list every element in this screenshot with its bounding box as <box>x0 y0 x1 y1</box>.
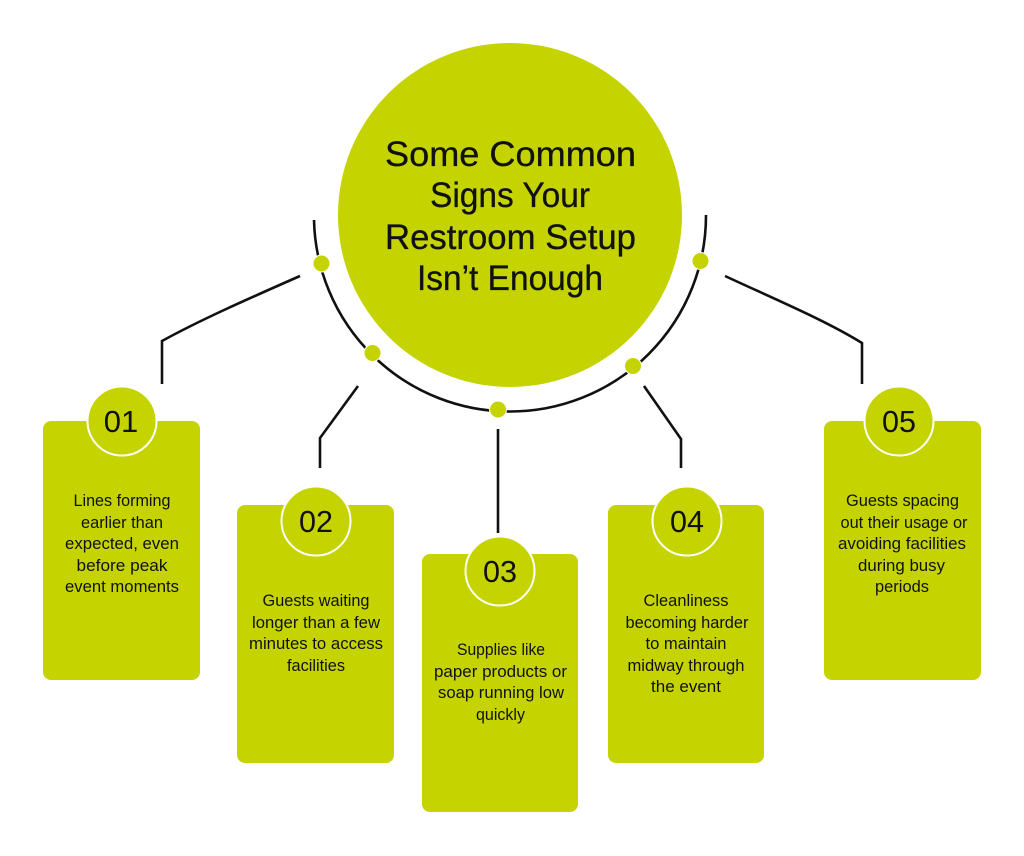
card 02: 02 <box>299 504 333 539</box>
card 01 <box>43 386 200 680</box>
card 04: to maintain <box>646 635 726 653</box>
card 05: during busy <box>858 557 946 575</box>
connector lines <box>162 276 862 533</box>
card 01: expected, even <box>65 535 179 553</box>
card 02: minutes to access <box>249 635 383 653</box>
card 05: 05 <box>882 404 916 439</box>
card 02: Guests waiting <box>262 592 370 610</box>
card 04: the event <box>651 678 721 696</box>
card 01: Lines forming <box>74 492 170 510</box>
card 02: facilities <box>287 657 345 675</box>
card 03 <box>422 536 578 812</box>
card 04: midway through <box>628 657 744 675</box>
card 05 <box>824 386 981 680</box>
card 04: Cleanliness <box>644 592 728 610</box>
card 03: paper products or <box>434 663 568 681</box>
card 01: earlier than <box>81 514 163 532</box>
title: Restroom Setup <box>385 218 636 257</box>
card 03: 03 <box>483 554 517 589</box>
card 03: Supplies like <box>457 641 545 659</box>
card 05: avoiding facilities <box>838 535 966 553</box>
card 04 <box>608 486 764 763</box>
card 03: quickly <box>476 706 526 724</box>
card 01: event moments <box>65 578 179 596</box>
title: Signs Your <box>430 176 590 215</box>
title: Isn’t Enough <box>417 259 603 298</box>
card 03: soap running low <box>438 684 564 702</box>
card 04: 04 <box>670 504 704 539</box>
card 01: 01 <box>104 404 138 439</box>
title <box>385 135 636 298</box>
card 01: before peak <box>76 557 168 575</box>
card 02: longer than a few <box>252 614 380 632</box>
card 05: out their usage or <box>840 514 968 532</box>
title: Some Common <box>385 135 636 174</box>
card 05: Guests spacing <box>846 492 959 510</box>
card 04: becoming harder <box>626 614 749 632</box>
card 02 <box>237 486 394 763</box>
central circle with title <box>338 43 682 387</box>
card 05: periods <box>875 578 929 596</box>
outer arc with node dots <box>312 215 710 418</box>
